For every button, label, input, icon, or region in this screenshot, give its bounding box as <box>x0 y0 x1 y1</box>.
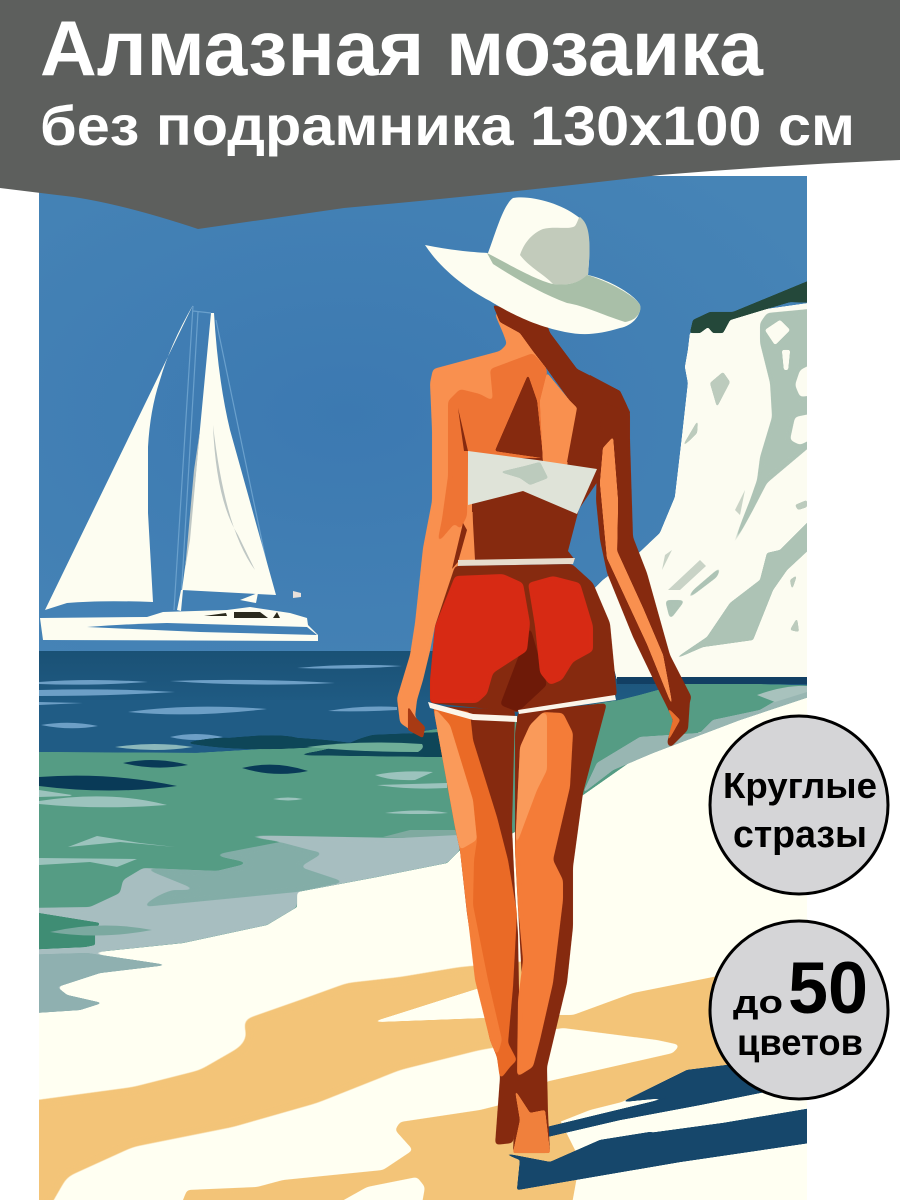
mainsail <box>45 305 193 610</box>
bikini top <box>468 451 597 514</box>
badge: up to 50 colours: 50 <box>788 948 868 1029</box>
sailing yacht <box>40 305 318 641</box>
sea <box>39 651 807 760</box>
header banner <box>0 0 900 229</box>
sky <box>39 176 807 652</box>
badge: up to 50 colours: до <box>733 984 783 1020</box>
badge: up to 50 colours: цветов <box>737 1022 863 1063</box>
sun hat <box>425 197 640 334</box>
right leg <box>513 703 607 1153</box>
badge: round rhinestones <box>710 716 888 894</box>
dark water patches <box>39 732 448 867</box>
left leg <box>433 706 520 1145</box>
shallow green water <box>20 684 830 955</box>
white cliff <box>595 282 807 679</box>
torso and neck <box>437 305 630 569</box>
title: Алмазная мозаика <box>40 4 764 92</box>
sand patches <box>39 961 727 1200</box>
shorts <box>428 558 617 722</box>
badge: round rhinestones: стразы <box>733 814 867 856</box>
rigging <box>174 306 270 610</box>
woman figure <box>397 197 692 1153</box>
woman's shadow on sand <box>503 1065 830 1190</box>
sea foam <box>20 677 830 1014</box>
badge: round rhinestones: Круглые <box>723 765 877 806</box>
jib sail <box>182 313 276 595</box>
flag <box>293 591 301 598</box>
subtitle: без подрамника 130х100 см <box>40 94 855 157</box>
badge: up to 50 colours <box>710 921 888 1099</box>
cream beach <box>39 680 830 1200</box>
panel: beach poster illustration <box>15 176 830 1200</box>
right arm <box>596 400 692 748</box>
left arm and shoulder <box>397 310 547 738</box>
yacht hull <box>40 607 318 641</box>
